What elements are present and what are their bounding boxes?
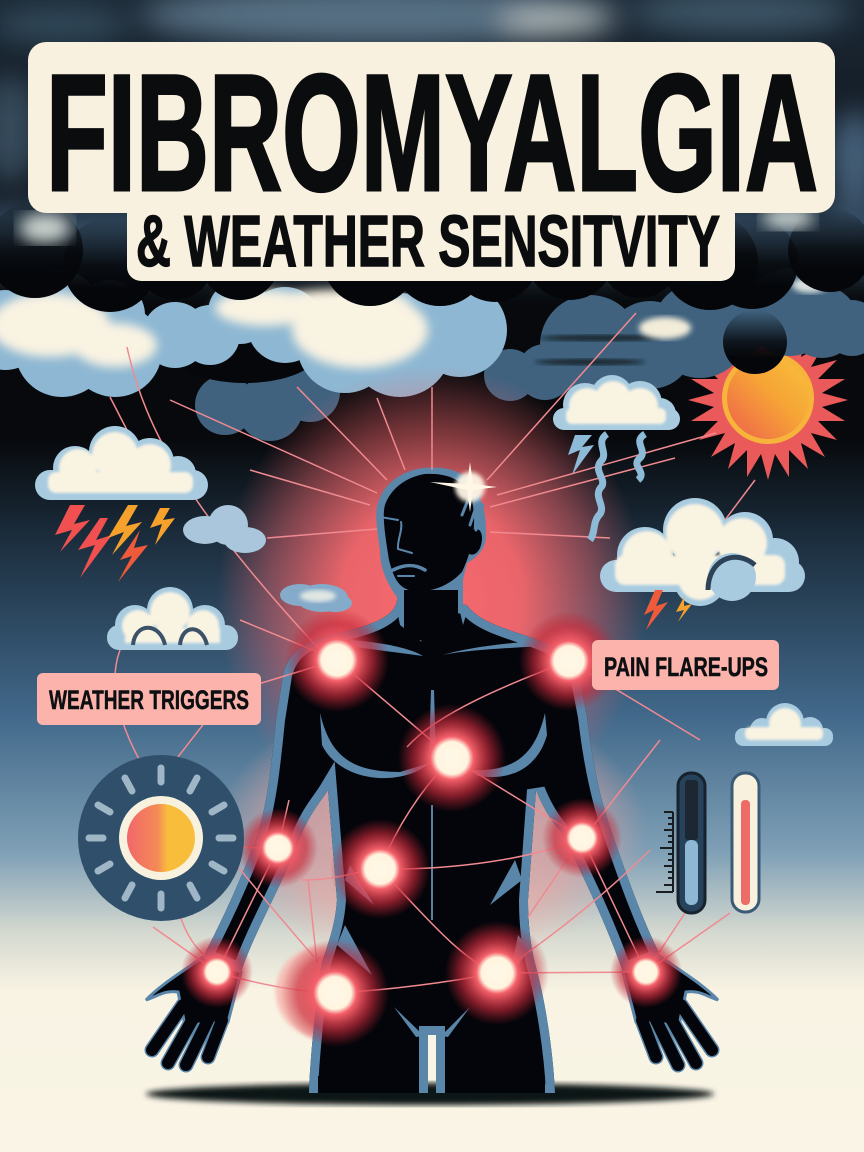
midline (431, 805, 433, 920)
black gap behind cream clouds (170, 317, 320, 383)
ground shadow (146, 1083, 714, 1105)
sun (688, 320, 848, 480)
label: weather triggers (37, 673, 261, 725)
pale glow behind hip (276, 946, 368, 1038)
cloud: top right with storm (553, 375, 680, 540)
pain points (181, 462, 682, 1047)
pale glow behind lower body (217, 695, 647, 965)
cream clouds, upper centre (208, 280, 507, 397)
red halo behind body (217, 365, 647, 835)
dark cloud lobes under the title (0, 202, 864, 312)
cream clouds, upper left (0, 270, 240, 397)
small blue clouds (183, 505, 352, 612)
label: pain flare-ups (592, 640, 779, 690)
weather dial icon (78, 755, 244, 921)
body silhouette (203, 600, 661, 1093)
right hand (623, 957, 718, 1065)
ear (467, 529, 482, 555)
cloud: small right (735, 703, 833, 746)
thermometers (656, 773, 759, 913)
head (376, 468, 486, 640)
title panel (28, 41, 835, 282)
connecting lines (110, 313, 755, 993)
label: weather triggers: WEATHER TRIGGERS (49, 685, 249, 715)
storm sky: top band (0, 0, 864, 275)
slate clouds (195, 268, 864, 441)
cloud: right big (600, 498, 805, 630)
left hand (146, 957, 241, 1065)
cloud: left with lightning (35, 426, 208, 582)
cloud: left mid (107, 587, 238, 650)
chest and muscle detail (320, 610, 547, 1037)
face features (380, 485, 483, 576)
label: pain flare-ups: PAIN FLARE-UPS (604, 652, 768, 682)
